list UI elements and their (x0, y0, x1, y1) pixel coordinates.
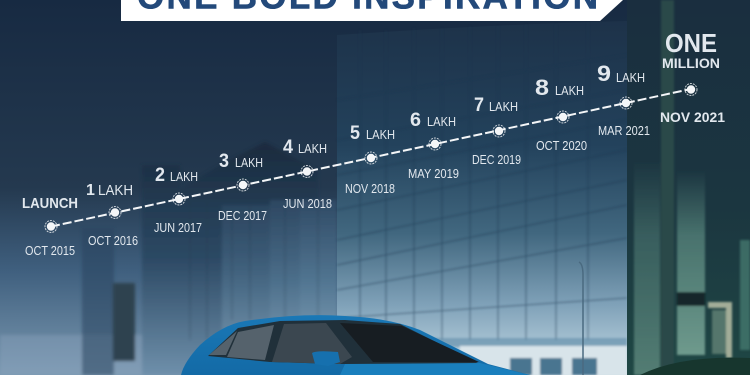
milestone labels: 3 (219, 151, 229, 172)
milestone labels: 5 (350, 123, 360, 144)
car door window (272, 323, 352, 364)
car rear windows (209, 325, 274, 360)
date labels: DEC 2019 (472, 153, 521, 167)
date labels: NOV 2018 (345, 182, 395, 196)
milestone labels: 1 (86, 182, 95, 199)
milestone labels: LAKH (616, 71, 645, 85)
milestone labels: LAKH (366, 128, 395, 142)
background: glass tower (337, 21, 627, 375)
milestone labels: 7 (474, 95, 484, 116)
milestone labels: 9 (597, 61, 611, 86)
milestone labels: LAKH (555, 84, 584, 98)
timeline markers (45, 84, 697, 232)
milestone labels: 2 (155, 165, 165, 186)
milestone labels: ONE (665, 28, 717, 58)
date labels: JUN 2018 (283, 197, 332, 211)
background: dark tower on right (627, 0, 750, 375)
milestone labels: 8 (535, 75, 549, 100)
car mirror (312, 351, 340, 366)
date labels: JUN 2017 (154, 221, 202, 235)
milestone labels: 4 (283, 137, 293, 158)
title banner (121, 0, 623, 21)
milestone labels: LAKH (427, 115, 456, 129)
timeline dashed line (51, 89, 691, 226)
milestone labels: LAKH (489, 100, 518, 114)
milestone labels: LAKH (235, 156, 263, 170)
date labels: DEC 2017 (218, 209, 267, 223)
milestone labels: MILLION (662, 55, 720, 71)
car pillars (208, 320, 480, 364)
milestone labels: LAKH (98, 182, 133, 199)
date labels (25, 109, 725, 258)
milestone labels: LAUNCH (22, 195, 78, 212)
car (181, 315, 530, 375)
milestone labels: 6 (410, 110, 421, 131)
car windscreen (340, 323, 479, 362)
date labels: OCT 2016 (88, 234, 138, 248)
background: left towers (0, 142, 337, 375)
car hood (340, 363, 530, 375)
milestone labels: LAKH (298, 142, 327, 156)
milestone labels (22, 28, 720, 212)
date labels: OCT 2015 (25, 244, 75, 258)
date labels: MAY 2019 (408, 167, 459, 181)
date labels: NOV 2021 (660, 109, 725, 125)
date labels: OCT 2020 (536, 139, 587, 153)
date labels: MAR 2021 (598, 124, 650, 138)
milestone labels: LAKH (170, 170, 198, 184)
